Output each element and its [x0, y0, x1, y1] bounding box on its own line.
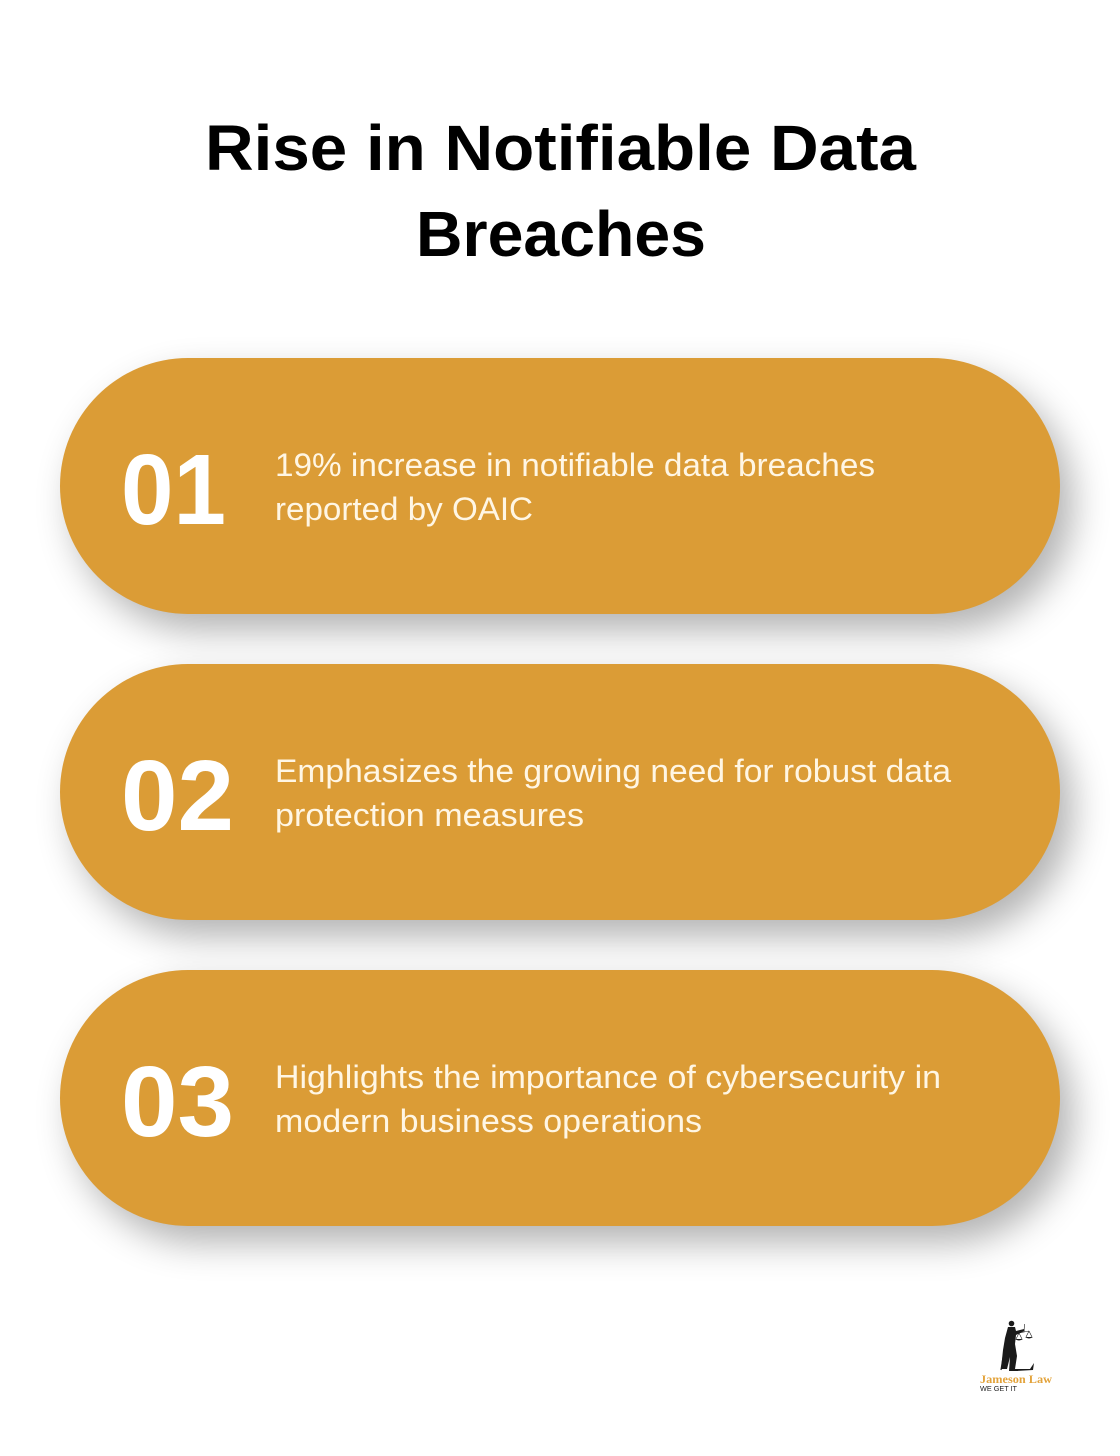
- panel: item 01 background: [60, 358, 1060, 614]
- text 02: [275, 753, 951, 833]
- item 01 content: [121, 434, 875, 546]
- panel: item 02 background: [60, 664, 1060, 920]
- logo name: Jameson Law: [980, 1374, 1053, 1386]
- panel: item 03 background: [60, 970, 1060, 1226]
- title: Rise in Notifiable Data: [205, 112, 916, 184]
- text 03: modern business operations: [275, 1103, 702, 1139]
- text 03: Highlights the importance of cybersecurity in: [275, 1059, 941, 1095]
- logo tagline: WE GET IT: [980, 1386, 1018, 1393]
- text 01: 19% increase in notifiable data breaches: [275, 447, 875, 483]
- text 01: [275, 447, 875, 527]
- text 02: Emphasizes the growing need for robust data: [275, 753, 951, 789]
- item 03 content: [121, 1046, 941, 1158]
- text 01: reported by OAIC: [275, 491, 533, 527]
- title: Breaches: [416, 198, 706, 270]
- icon: lady justice: [1001, 1321, 1034, 1371]
- logo: Jameson Law: [980, 1321, 1053, 1393]
- number 03: 03: [121, 1046, 234, 1158]
- number 02: 02: [121, 740, 234, 852]
- text 02: protection measures: [275, 797, 584, 833]
- title: [205, 112, 916, 270]
- number 01: 01: [121, 434, 226, 546]
- text 03: [275, 1059, 941, 1139]
- item 02 content: [121, 740, 951, 852]
